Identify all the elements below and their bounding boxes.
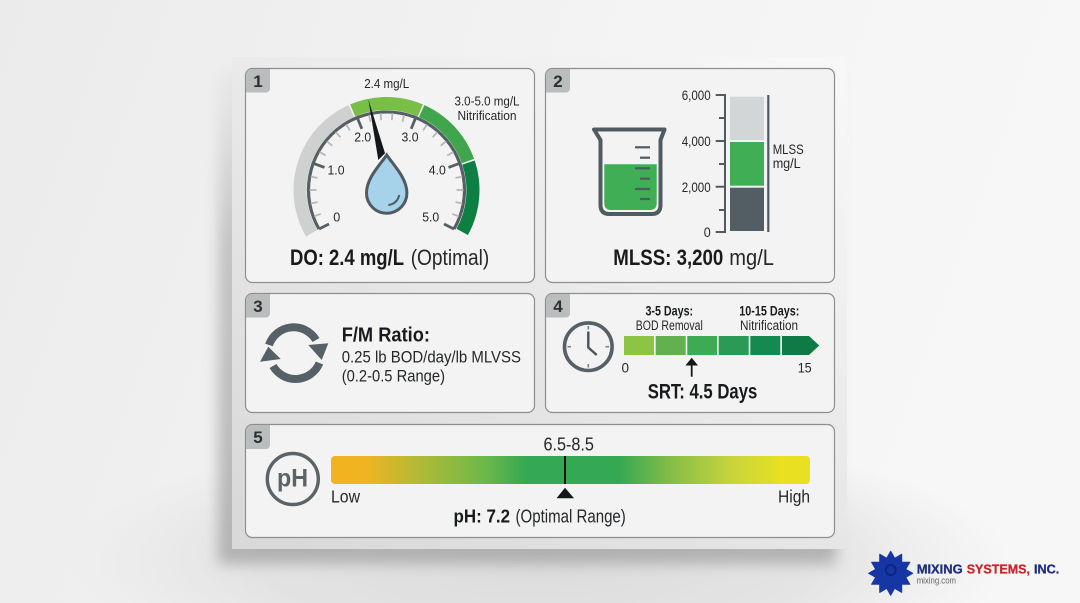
heading: pH value (454, 506, 626, 526)
icon: beaker with green liquid (594, 130, 664, 214)
gauge: scale numbers: 5.0 (422, 210, 439, 225)
labels: low and high (331, 486, 810, 506)
gauge: scale numbers: 2.0 (354, 130, 371, 145)
icon: water drop (366, 155, 407, 213)
logo: Mixing Systems, Inc. (869, 551, 1059, 595)
labels: SRT ranges: 10-15 Days: (739, 304, 799, 319)
badge: number 5 (246, 425, 270, 449)
gauge: dial ring and ticks (308, 112, 465, 229)
badge: number 5: 5 (253, 428, 263, 447)
labels: bar scale: 15 (798, 359, 812, 375)
badge: number 4 (546, 294, 570, 318)
labels: low and high: High (778, 486, 810, 506)
heading: DO value: (Optimal) (411, 245, 489, 270)
labels: bar scale (622, 359, 812, 375)
gauge: scale numbers: 0 (333, 210, 340, 225)
chart: MLSS stacked scale: 2,000 (682, 180, 711, 195)
labels: SRT ranges: Nitrification (740, 318, 798, 333)
chart: MLSS stacked scale (682, 88, 804, 240)
heading: SRT value: SRT: 4.5 Days (648, 380, 757, 403)
icon: pH circle (267, 454, 318, 504)
label: nitrification range (454, 94, 520, 123)
labels: low and high: Low (331, 486, 360, 506)
heading: MLSS value: mg/L (729, 245, 774, 270)
labels: SRT ranges (636, 304, 799, 333)
gauge: scale numbers: 4.0 (429, 163, 446, 178)
heading: pH value: (Optimal Range) (516, 506, 626, 526)
chart: MLSS stacked scale: 0 (704, 225, 711, 240)
chart: MLSS stacked scale: 6,000 (682, 88, 711, 103)
badge: number 1 (246, 69, 270, 92)
panel: F/M ratio (246, 294, 534, 412)
icon: pH circle: pH (277, 464, 308, 492)
labels: SRT ranges: BOD Removal (636, 318, 703, 333)
labels: bar scale: 0 (622, 359, 629, 375)
gauge: scale numbers: 3.0 (402, 130, 418, 145)
badge: number 2 (546, 69, 570, 92)
text: F/M ratio details: F/M Ratio: (342, 325, 430, 347)
panel: SRT (546, 294, 834, 412)
badge: number 1: 1 (253, 72, 263, 91)
label: nitrification range: 3.0-5.0 mg/L (454, 94, 520, 109)
chart: MLSS stacked scale: MLSS (773, 142, 804, 157)
chart: SRT segmented arrow bar (624, 336, 819, 355)
badge: number 3 (246, 294, 270, 318)
labels: SRT ranges: 3-5 Days: (645, 304, 693, 319)
label: current DO reading: 2.4 mg/L (364, 76, 409, 91)
gauge: coloured range bands (300, 104, 473, 233)
panel: pH (246, 424, 834, 538)
panel: dissolved oxygen gauge (246, 68, 534, 282)
text: company name (917, 561, 1059, 576)
icon: clock (564, 323, 612, 371)
text: company name: SYSTEMS, (967, 561, 1030, 576)
label: optimal range: 6.5-8.5 (543, 435, 594, 455)
chart: MLSS stacked scale: mg/L (773, 156, 801, 171)
heading: DO value (290, 245, 489, 270)
text: F/M ratio details: (0.2-0.5 Range) (342, 367, 445, 386)
heading: pH value: pH: 7.2 (454, 506, 510, 526)
gauge: needle (368, 99, 385, 160)
text: F/M ratio details (342, 325, 521, 386)
text: company name: INC. (1034, 561, 1059, 576)
heading: DO value: DO: 2.4 mg/L (290, 245, 404, 270)
panel: MLSS (546, 68, 834, 282)
icon: cycle arrows (260, 327, 328, 379)
backing card (232, 57, 847, 549)
gauge: scale numbers: 1.0 (328, 163, 344, 178)
chart: MLSS stacked scale: 4,000 (682, 134, 711, 149)
badge: number 4: 4 (553, 297, 563, 316)
heading: MLSS value: MLSS: 3,200 (613, 245, 723, 270)
label: nitrification range: Nitrification (458, 108, 516, 123)
arrow: SRT marker (685, 358, 698, 377)
badge: number 2: 2 (553, 72, 563, 91)
badge: number 3: 3 (253, 297, 263, 316)
icon: blue gear (869, 551, 913, 595)
gauge: scale numbers (328, 130, 446, 225)
chart: pH gradient bar (331, 456, 810, 498)
text: website: mixing.com (917, 576, 956, 587)
text: F/M ratio details: 0.25 lb BOD/day/lb MLVSS (342, 347, 521, 366)
text: company name: MIXING (917, 561, 963, 576)
